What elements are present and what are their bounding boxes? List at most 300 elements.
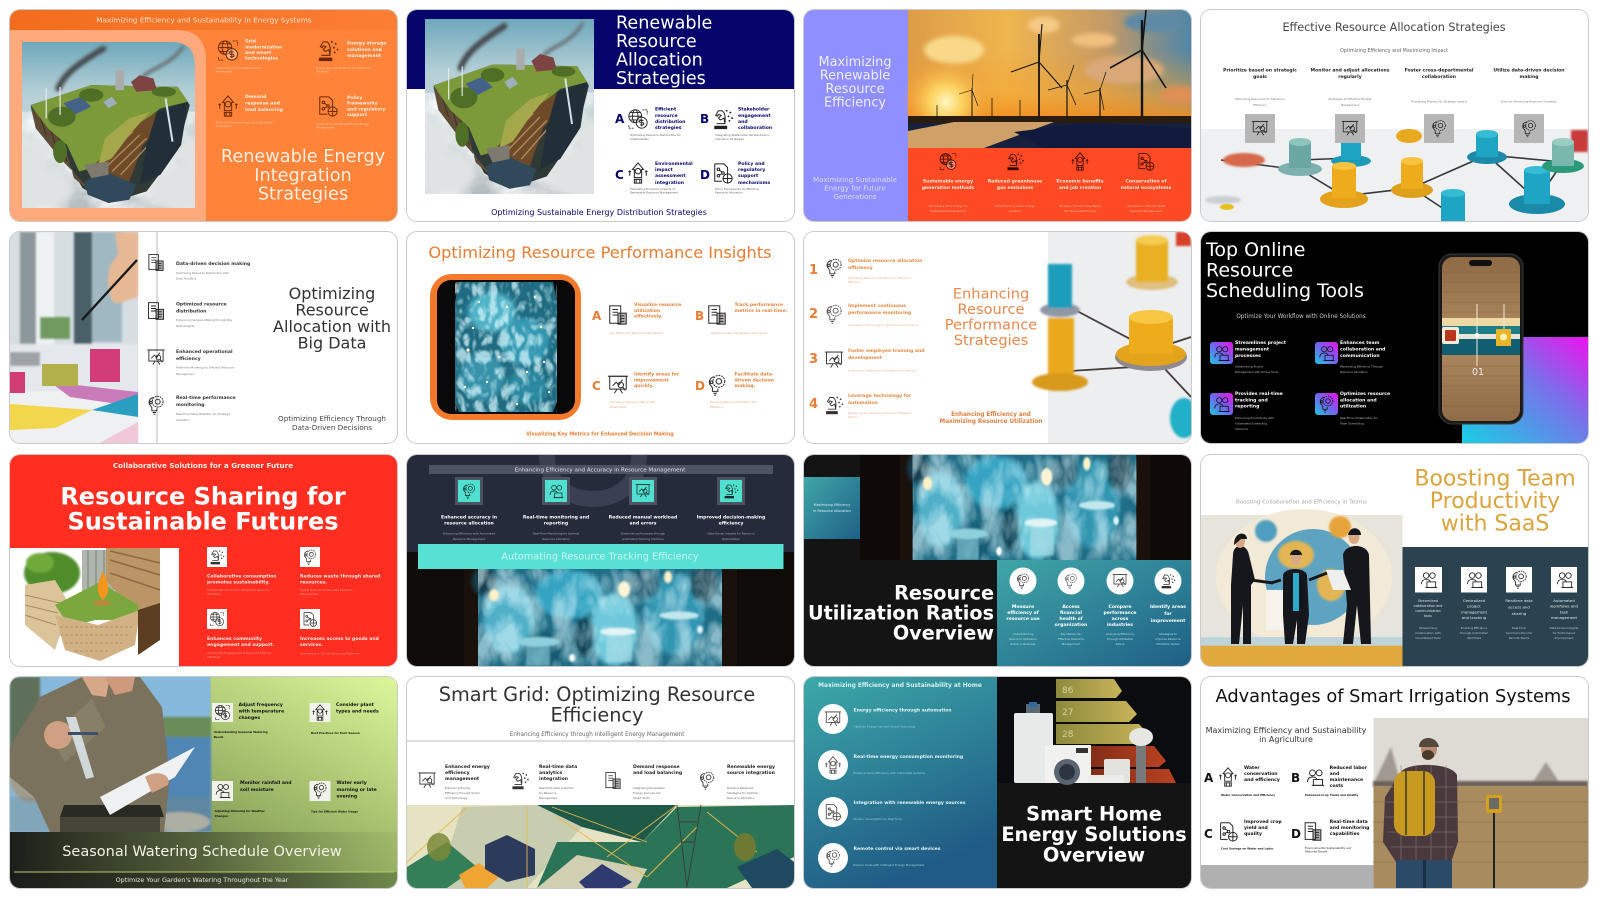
item D (1291, 819, 1369, 854)
item B: Reduced labor (1330, 765, 1368, 771)
item 4: Leverage technology for (848, 393, 912, 399)
item: access: Innovations in Circular Economy Platforms (300, 652, 360, 656)
panel: Enhancing Resource Performance Strategies (804, 232, 1191, 443)
item: identify: Identify areas (1150, 604, 1186, 610)
title: Strategies (616, 69, 706, 89)
band title (418, 544, 784, 569)
item: renewable integration: Resource Allocation (727, 796, 755, 800)
item: renewable integration: Demand Response (727, 786, 753, 790)
item: solar: Sustainable energy (923, 179, 973, 185)
panel: Optimizing Resource Performance Insights (407, 232, 794, 443)
neon gradient block (1462, 337, 1588, 443)
item: identify: improvement (1151, 618, 1186, 624)
item A: Sustainability (630, 137, 649, 141)
item: realtime data: access and (1508, 604, 1530, 610)
item C: C (592, 379, 601, 393)
item: monitor: Management (1341, 103, 1360, 107)
item: demand response: Integration (216, 124, 231, 128)
item: access (300, 609, 379, 656)
photo: biomass block (10, 548, 179, 666)
item: prioritize: goals (1253, 74, 1267, 80)
title: Efficiency (824, 96, 886, 110)
item: workload (609, 477, 677, 541)
item: biomass: Into Renewable Energy (1064, 209, 1096, 213)
item: wind (988, 154, 1042, 213)
dark panel (1402, 547, 1588, 666)
item: centralized: management (1461, 609, 1488, 614)
item: enhances: Maximizing Efficiency Through (1340, 364, 1383, 368)
item: wind: Solution (1009, 209, 1021, 213)
item: biomass: Economic benefits (1056, 179, 1104, 185)
item: enhances (1315, 340, 1385, 374)
item B (700, 107, 772, 141)
item: operational efficiency: efficiency (176, 356, 201, 362)
item: monitor (1311, 68, 1390, 143)
item C: Environmental (655, 161, 693, 167)
title: Scheduling Tools (1206, 280, 1364, 302)
item: biomass: Biomass: Transforming Waste (1059, 204, 1101, 208)
title: Smart Grid: Optimizing Resource (439, 683, 755, 706)
item 2: 2 (809, 307, 818, 322)
small teal box: in Resource Allocation (813, 509, 851, 513)
subtitle: Data-Driven Decisions (292, 423, 372, 432)
item: automated: task (1560, 609, 1569, 614)
item: operational efficiency: Enhanced operational (176, 349, 233, 355)
item: operational efficiency: Management (176, 372, 195, 376)
item D: regulatory (738, 167, 765, 173)
item: optimizes allocation (1315, 391, 1390, 426)
item 3: 3 (809, 352, 818, 367)
item: optimized distribution (148, 302, 232, 328)
item: policy frameworks: support (347, 112, 368, 118)
item: automation: Energy efficiency through automation (854, 708, 952, 714)
rule (14, 871, 394, 873)
item: access: Effective Resource (1058, 637, 1084, 641)
item: streamlines (1210, 340, 1287, 374)
title: Seasonal Watering Schedule Overview (62, 844, 342, 860)
item: realtime data: Communication for (1506, 631, 1533, 635)
item: enhances: Resource Allocation (1340, 370, 1368, 374)
item: centralized: Workflows (1467, 636, 1482, 640)
item: access: Management (1062, 642, 1081, 646)
item: streamlined: Streamlined (1418, 599, 1438, 603)
item: collaborative consumption (207, 547, 276, 596)
item: streamlined: Collaboration with (1415, 631, 1441, 635)
decorative ring (547, 455, 639, 499)
item: centralized: through Automated (1460, 631, 1488, 635)
item: grid modernization: Renewables (216, 70, 233, 74)
title: Productivity (1430, 489, 1560, 514)
item: measure: efficiency of (1007, 610, 1040, 616)
item: utilize: Utilize data-driven decision (1493, 68, 1565, 74)
item A (615, 107, 685, 141)
panel: Top Online Resource Scheduling Tools (1201, 232, 1588, 443)
item: access: financial (1060, 610, 1082, 616)
item B: maintenance (1330, 777, 1363, 783)
photo: appliances and energy labels (997, 677, 1191, 785)
gray band (1201, 865, 1374, 888)
title: Renewable (616, 14, 712, 34)
item A: A (1204, 771, 1214, 785)
item: compare: Through Utilization (1106, 637, 1133, 641)
panel: Optimizing Resource Allocation with Big Data (10, 232, 397, 443)
item: temperature: Needs (214, 735, 224, 739)
item D: Policy Frameworks for Effective (715, 187, 759, 191)
item: optimized distribution: distribution (176, 308, 206, 314)
item: real-time tracking: Automated Scheduling (1235, 422, 1267, 426)
item: renewable integration: Strategies for Optimal (727, 791, 758, 795)
footer: Optimizing Sustainable Energy Distribution Strategies (491, 208, 707, 217)
item: enhanced efficiency: management (445, 776, 480, 782)
item: consumption: Enhance Home Efficiency with Automated Systems (854, 771, 926, 775)
item: energy storage: management (347, 53, 382, 59)
item: enhanced efficiency: Grid Technology (445, 796, 468, 800)
item: demand response: load balancing (245, 107, 283, 113)
item: optimized distribution: Enhancing Decision-Making through Big (176, 318, 232, 322)
title: Resource (894, 582, 994, 604)
item: monitoring: reporting (544, 520, 568, 526)
item A (592, 302, 681, 335)
subtitle: Collaborative Solutions for a Greener Future (113, 461, 293, 470)
item C: Identify areas for (634, 372, 680, 378)
item: access: Key Metrics for (1061, 632, 1082, 636)
photo: isometric smart grid (407, 805, 794, 888)
title: Sustainable Futures (67, 508, 339, 536)
photo: jar of lights (860, 455, 1191, 560)
item: centralized: Centralized (1463, 598, 1486, 603)
item 1: Efficiency (848, 280, 862, 284)
item: rainfall: Monitor rainfall and (240, 780, 292, 786)
photo: appliances and energy labels: 27 (1062, 708, 1073, 718)
item C: C (1204, 827, 1213, 841)
heading: Maximizing Efficiency and Sustainability at Home (818, 683, 982, 689)
item: access: services. (300, 642, 323, 648)
peach image backing (10, 30, 206, 221)
item: real-time data analytics: Real-time data (539, 764, 577, 770)
item A: effectively. (634, 314, 663, 320)
divider line (156, 232, 158, 443)
title: Performance (945, 316, 1037, 334)
item: streamlines: Streamlines project (1235, 340, 1287, 346)
item A: A (592, 309, 602, 323)
item: prioritize: Efficiency (1253, 103, 1267, 107)
item D (695, 372, 774, 409)
item: renewable integration: source integration (727, 770, 775, 776)
item B: Enhanced Crop Yields and Quality (1305, 793, 1358, 797)
item: decision making: Improved decision-making (697, 514, 765, 520)
item A: Water (1244, 765, 1260, 771)
item: prioritize: Prioritize based on strategic (1223, 68, 1297, 74)
item B: Integrating Stakeholder Perspectives in (715, 133, 770, 137)
item: measure: resource use (1006, 616, 1040, 622)
photo: appliances and energy labels: 86 (1062, 686, 1074, 696)
title: Optimizing (289, 284, 375, 303)
item C (1204, 819, 1282, 850)
item: optimizes allocation: Optimizes resource (1340, 391, 1390, 397)
item: enhanced efficiency: Efficiency through Smart (445, 791, 481, 795)
item: remote (818, 843, 941, 873)
item: enhanced efficiency (418, 764, 490, 800)
item: real-time tracking: reporting (1235, 404, 1259, 410)
item D: making. (734, 383, 756, 389)
item D: support (738, 173, 759, 179)
item: utilize (1493, 68, 1565, 143)
item A: and efficiency (1244, 777, 1280, 783)
item 1: Optimize resource allocation (848, 258, 922, 264)
item: real-time tracking: Solutions (1235, 427, 1248, 431)
item: demand response (606, 764, 682, 800)
panel: Renewable Resource Allocation Strategies (407, 10, 794, 221)
item B: B (1291, 771, 1300, 785)
item: real-time tracking: tracking and (1235, 398, 1268, 404)
photo: floating island (401, 19, 621, 198)
item B: costs (1330, 783, 1343, 789)
item: grid modernization: Optimizing Grid Infrastructure for (216, 66, 263, 70)
photo: wind turbines at sunset (902, 10, 1199, 148)
item: identify: Strategies to (1159, 632, 1177, 636)
title: Integration (254, 166, 352, 186)
item: measure: Resource Utilization (1009, 637, 1037, 641)
item: temperature: Understanding Seasonal Watering (214, 730, 268, 734)
item: measure (1006, 568, 1040, 646)
subtitle: Enhancing Efficiency and (951, 412, 1031, 418)
title: with SaaS (1441, 512, 1549, 536)
item: renewable: Monitor Consumption in Real Time (854, 817, 902, 821)
item: automated: Improvement (1555, 636, 1574, 640)
photo: man testing water (10, 677, 211, 832)
item B: and (738, 119, 748, 125)
item: workload: Streamlining Processes through (621, 532, 665, 536)
subtitle: Maximizing Resource Utilization (940, 419, 1042, 425)
subtitle: in Agriculture (1259, 735, 1313, 744)
teal panel (997, 560, 1191, 666)
item: automated (1550, 567, 1579, 640)
item: monitor: regularly (1338, 74, 1362, 80)
item: optimizes allocation: allocation and (1340, 398, 1377, 404)
item: real-time tracking: Provides real-time (1235, 391, 1283, 397)
item: energy storage: solutions and (347, 47, 382, 53)
item: access (1055, 568, 1087, 646)
item: centralized: project (1467, 604, 1481, 609)
item: compare: Analyzing Efficiency (1106, 632, 1134, 636)
item D: Efficiency (710, 405, 724, 409)
item: demand response (216, 94, 283, 128)
photo: floating island (22, 42, 195, 208)
item: enhanced efficiency: efficiency (445, 770, 470, 776)
title: Boosting Team (1414, 466, 1576, 492)
title: Resource (958, 301, 1024, 318)
photo: hand writing on desk (10, 232, 138, 443)
item: energy storage: Energy Storage Solutions for Enhanced (316, 66, 371, 70)
item: accuracy: Enhancing Efficiency with Automated (443, 532, 495, 536)
item 1 (809, 258, 922, 284)
item: demand response: Energy Sources into (633, 791, 661, 795)
item: foster: Prioritizing Projects for Strategic Impact (1411, 100, 1468, 104)
item: grid modernization: Grid (245, 38, 256, 44)
item: real-time monitoring: Real-Time Data Utilization for Strategic (176, 412, 231, 416)
item: real-time data analytics: Real-time Data Analytics (539, 786, 574, 790)
item: compare: performance (1103, 610, 1137, 616)
item: grid modernization (216, 38, 282, 74)
item: solar: generation methods (922, 185, 975, 191)
item: temperature (212, 702, 284, 739)
item: policy frameworks: frameworks (347, 101, 378, 107)
item: wind: Reduced greenhouse (988, 179, 1042, 185)
item C: integration (655, 180, 684, 186)
item: foster (1405, 68, 1474, 143)
item: optimizes allocation: Team Scheduling (1339, 422, 1364, 426)
item: streamlined (1414, 567, 1442, 640)
title: Overview (1043, 844, 1145, 866)
top bar (429, 465, 773, 474)
item D: Real-time data (1330, 819, 1368, 825)
item: grid modernization: and smart (245, 50, 272, 56)
item: collaborative consumption: promotes sustainability. (207, 580, 270, 586)
item: decision making: Optimization (722, 537, 740, 541)
item 4: Metrics (848, 415, 859, 419)
item: compare: industries (1107, 622, 1133, 628)
item: consumption (818, 750, 963, 780)
item: realtime data (1505, 567, 1533, 640)
item 3 (809, 348, 925, 372)
item D (700, 161, 770, 194)
item: hydropower: Resource Management (1130, 209, 1163, 213)
item A: A (615, 112, 625, 126)
item: real-time data analytics: Management (539, 796, 558, 800)
title: Optimizing Resource Performance Insights (428, 243, 772, 262)
item B (1291, 765, 1368, 797)
item 4: Measuring and Analyzing Resource Utilization (848, 411, 912, 415)
item: identify: for (1164, 611, 1172, 617)
teal panel (804, 677, 997, 888)
item: automation: Optimize Energy Use with Smart Technology (854, 724, 916, 728)
top bar: Enhancing Efficiency and Accuracy in Resource Management (515, 468, 686, 474)
item: real-time data analytics: integration (539, 776, 568, 782)
item: centralized: Enabling Efficiency (1461, 626, 1488, 630)
title: Efficiency (551, 704, 643, 726)
item: hydropower (1121, 154, 1172, 213)
item: demand response: and load balancing (633, 770, 682, 776)
title: Top Online (1205, 239, 1305, 261)
item B (695, 302, 788, 335)
item: rainfall: Changes (215, 814, 228, 818)
panel: Maximizing Renewable Resource Efficiency (804, 10, 1191, 221)
item: real-time monitoring: monitoring (176, 402, 205, 408)
item 1: Optimizing Resource Allocation for Maximum (848, 276, 911, 280)
item: policy frameworks: Policy (347, 95, 362, 101)
item A (1204, 765, 1280, 797)
item: decision making: efficiency (719, 520, 743, 526)
item: real-time monitoring: Allocation (176, 418, 190, 422)
item: community engagement (207, 609, 275, 659)
item A: Key Metrics for Resource Optimization (610, 331, 664, 335)
title: Big Data (298, 334, 366, 352)
item: access: Increases access to goods and (300, 636, 379, 642)
item: data-driven: Optimizing Resource Distribution with (176, 271, 229, 275)
item: decision making (697, 477, 765, 541)
item A: Optimizing Resource Distribution for (630, 133, 682, 137)
item 2: Implement continuous (848, 303, 906, 309)
gold band (1201, 646, 1402, 667)
item: collaborative consumption: Collaborative Economy: Redefining Resource (207, 588, 270, 592)
item: optimized distribution: Optimized resource (176, 302, 227, 308)
illustration: phone: 01 (1472, 367, 1484, 378)
item: biomass: and job creation (1059, 185, 1101, 191)
item: data-driven: Data-driven decision making (176, 261, 250, 267)
item B: B (695, 309, 704, 323)
item C: impact (655, 167, 673, 173)
item 3: development (848, 355, 883, 361)
item: reduces waste: Management (300, 592, 319, 596)
item: identify (1150, 568, 1186, 646)
item: demand response: Demand (245, 94, 266, 100)
panel: Seasonal Watering Schedule Overview (10, 677, 397, 888)
item: energy storage (316, 40, 387, 74)
item: real-time monitoring: Real-time performance (176, 395, 236, 401)
item C: Cost Savings on Water and Labor (1221, 846, 1274, 850)
item: streamlines: Streamlining Project (1235, 364, 1264, 368)
item: optimized distribution: Data Insights (176, 324, 195, 328)
item: solar: Sustainable Development (930, 209, 967, 213)
illustration: phone (1439, 254, 1523, 424)
item: remote: Reduce Costs with Intelligent Energy Management (854, 863, 925, 867)
panel: Effective Resource Allocation Strategies (1201, 10, 1588, 221)
item: temperature: Adjust frequency (239, 702, 283, 708)
item: renewable (818, 797, 966, 827)
photo: pegs close-up (1032, 232, 1198, 443)
item D: and monitoring (1330, 825, 1369, 831)
item: policy frameworks: and regulatory (347, 106, 385, 112)
item: streamlined: collaboration and (1414, 604, 1442, 608)
title: Resource (1206, 260, 1293, 282)
item: real-time data analytics (513, 764, 577, 800)
item 4: 4 (809, 397, 818, 412)
item: reduces waste (300, 547, 380, 596)
item C: Renewable Resource Management (630, 190, 679, 194)
item: temperature: with temperature (239, 708, 284, 714)
item: community engagement: Initiatives (207, 655, 221, 659)
item: monitoring: Real-time monitoring and (523, 514, 589, 520)
item: real-time data analytics: analytics (539, 770, 563, 776)
item: measure: Measure (1012, 604, 1034, 610)
title: Effective Resource Allocation Strategies (1282, 21, 1506, 34)
item A: Water Conservation and Efficiency (1221, 793, 1275, 797)
item: reduces waste: Digital Hubs for Sustainable Resource (300, 588, 353, 592)
subtitle: Boosting Collaboration and Efficiency in Teams (1236, 500, 1367, 506)
item C: quality (1244, 831, 1262, 837)
item: foster: collaboration (1422, 74, 1456, 80)
item D: Environmental Sustainability and (1305, 846, 1352, 850)
subtitle: Enhancing Efficiency through Intelligent Energy Management (510, 732, 685, 738)
item: automated: Data-Driven Insights (1550, 626, 1579, 630)
item B: Real-Time Data Visualization Techniques (711, 331, 768, 335)
item: hydropower: natural ecosystems (1121, 185, 1172, 191)
item B: Allocation Strategies (715, 137, 745, 141)
item: foster: Foster cross-departmental (1405, 68, 1474, 74)
item: hydropower: Conservation of (1126, 179, 1167, 185)
item: renewable integration (700, 764, 775, 800)
item A: Efficient (655, 107, 677, 113)
item: monitor: Strategies for Effective Budget (1328, 97, 1372, 101)
item: water early: evening (336, 794, 357, 800)
item: rainfall: Adjusting Watering for Weather (215, 809, 266, 813)
item C: Enhancing Decision-Making with (610, 400, 656, 404)
item: prioritize: Optimizing Resources for Maximum (1235, 97, 1285, 101)
item C: Improved crop (1244, 819, 1282, 825)
item D: D (1291, 827, 1301, 841)
item: realtime data: Realtime data (1505, 598, 1533, 603)
title: Strategies (258, 184, 348, 204)
